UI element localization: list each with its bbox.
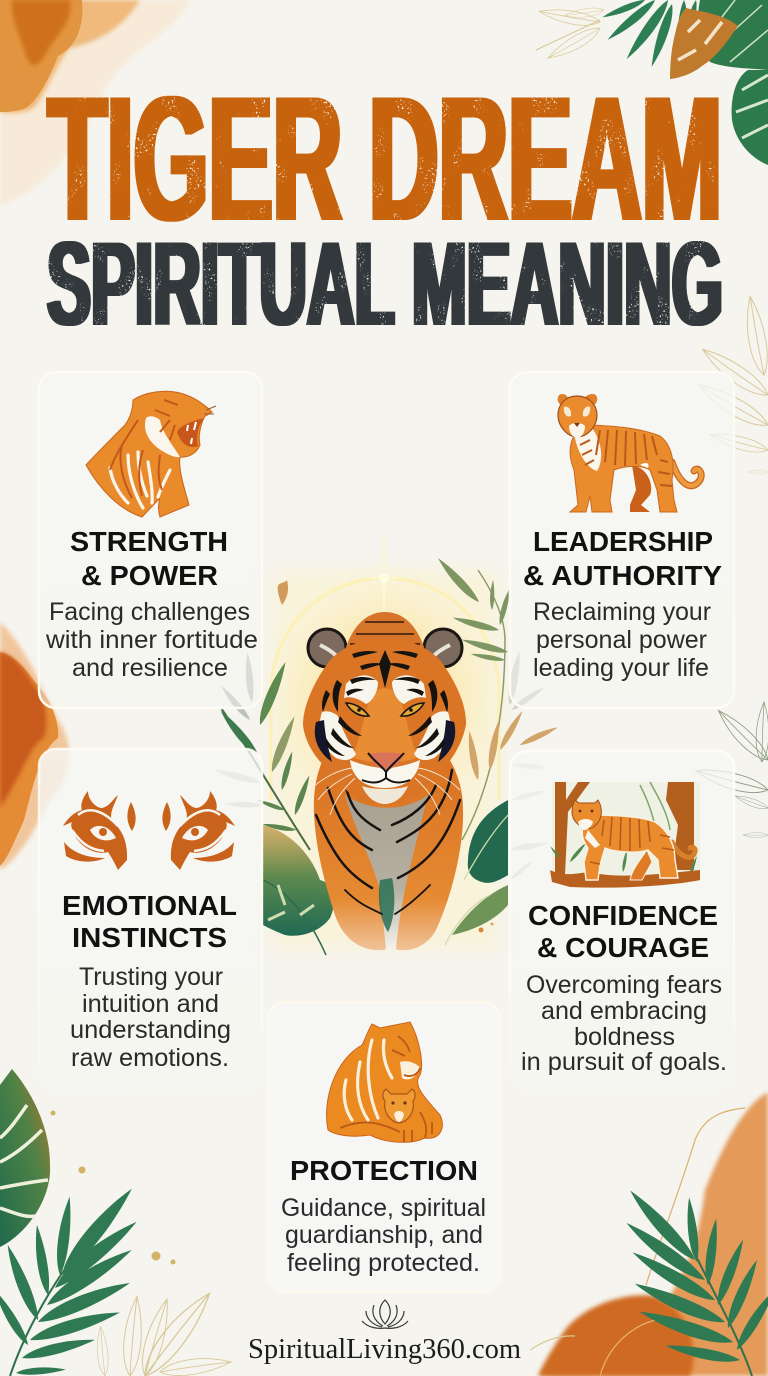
tiger head (303, 612, 466, 815)
panel: confidence and courage (510, 751, 734, 1091)
panel: emotional instincts (39, 749, 262, 1094)
description: intuition and (82, 990, 219, 1018)
heading line 2: & AUTHORITY (523, 560, 722, 591)
left monstera (263, 825, 334, 955)
central tiger illustration (214, 535, 559, 955)
description: Trusting your (79, 963, 223, 991)
description: Guidance, spiritual (281, 1194, 486, 1222)
description: raw emotions. (71, 1044, 229, 1072)
palm frond: bottom left (0, 1183, 141, 1376)
description: leading your life (533, 654, 709, 682)
description: with inner fortitude (45, 626, 258, 654)
description (521, 971, 727, 1076)
panel: leadership and authority (510, 372, 734, 708)
icon: tiger in jungle (549, 782, 700, 888)
icon: mother tiger and cub (327, 1022, 442, 1142)
icon: tiger eyes (63, 791, 235, 870)
heading line 2: & POWER (81, 560, 218, 591)
description (533, 598, 711, 682)
heading: STRENGTH (70, 526, 228, 557)
description (70, 963, 231, 1072)
description: personal power (536, 626, 707, 654)
description: understanding (70, 1016, 231, 1044)
monstera leaf: bottom left (0, 1069, 50, 1247)
halo glow (255, 535, 515, 950)
watercolor: left edge (0, 622, 69, 870)
gold leaves: bottom (95, 1286, 232, 1376)
icon: roaring tiger (86, 391, 216, 517)
gold leaves: top (536, 5, 605, 64)
description: and embracing (541, 997, 707, 1025)
description: feeling protected. (287, 1249, 480, 1277)
right foliage (435, 556, 559, 881)
description: Overcoming fears (526, 971, 722, 999)
description (281, 1194, 486, 1277)
gray green leaves: right middle (693, 702, 768, 838)
tiger ears (308, 629, 462, 667)
tiger body (314, 745, 463, 950)
heading: EMOTIONAL (62, 890, 237, 921)
gold dots (50, 1110, 176, 1264)
heading: LEADERSHIP (533, 526, 713, 557)
watercolor: bottom right (530, 1092, 768, 1376)
icon: lotus (362, 1300, 408, 1328)
website footer: SpiritualLiving360.com (248, 1333, 521, 1365)
gold leaves: right upper (694, 295, 768, 474)
watercolor: top left (0, 0, 190, 205)
heading line 2: INSTINCTS (72, 922, 227, 953)
heading: PROTECTION (290, 1155, 478, 1186)
left foliage (214, 580, 312, 850)
foliage: top right (601, 0, 768, 165)
description: and resilience (72, 654, 228, 682)
description: Reclaiming your (533, 598, 711, 626)
description: Facing challenges (49, 598, 250, 626)
right monstera (445, 800, 508, 945)
description: guardianship, and (285, 1221, 483, 1249)
description: in pursuit of goals. (521, 1048, 727, 1076)
panel: strength and power (39, 372, 262, 708)
heading: CONFIDENCE (528, 900, 718, 931)
panel: protection (268, 1002, 500, 1292)
heading line 2: & COURAGE (537, 932, 709, 963)
description: boldness (574, 1023, 675, 1051)
description (45, 598, 258, 682)
palm frond: bottom right (622, 1187, 768, 1376)
icon: standing tiger (558, 394, 701, 512)
